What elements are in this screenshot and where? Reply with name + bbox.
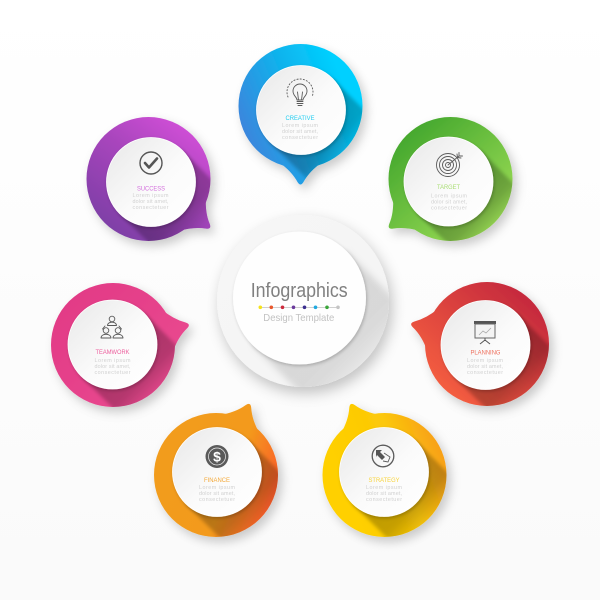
label: STRATEGY: STRATEGY bbox=[368, 477, 400, 484]
colored dots line bbox=[258, 306, 340, 309]
description: target: Lorem ipsum bbox=[431, 194, 468, 200]
description: creative bbox=[282, 123, 318, 141]
disc bbox=[68, 300, 157, 389]
disc bbox=[404, 137, 493, 226]
long shadow bbox=[352, 440, 446, 537]
disc bbox=[340, 428, 428, 516]
description: finance: dolor sit amet, bbox=[199, 491, 236, 497]
description: strategy: dolor sit amet, bbox=[366, 491, 402, 497]
icon: three people bbox=[101, 316, 123, 338]
description: finance: Lorem ipsum bbox=[199, 485, 236, 491]
label: PLANNING: PLANNING bbox=[470, 350, 500, 356]
label: TARGET: TARGET bbox=[437, 184, 460, 191]
subheading: Design Template: Design Template bbox=[263, 312, 334, 324]
description: target bbox=[431, 194, 468, 212]
speech bubble: teamwork bbox=[51, 283, 189, 407]
icon: dollar coin: $ bbox=[213, 448, 221, 464]
disc bbox=[172, 428, 262, 516]
icon: presentation board bbox=[474, 321, 496, 344]
description: planning: Lorem ipsum bbox=[467, 358, 504, 364]
speech bubble: target bbox=[388, 117, 512, 241]
description: target: dolor sit amet, bbox=[431, 200, 468, 206]
description: teamwork bbox=[94, 358, 131, 376]
description: success bbox=[132, 193, 169, 211]
outer disc bbox=[217, 215, 389, 387]
disc bbox=[106, 138, 196, 226]
description: planning: dolor sit amet, bbox=[467, 364, 504, 370]
description: strategy: consectetuer bbox=[366, 497, 402, 503]
description: teamwork: Lorem ipsum bbox=[94, 358, 131, 364]
speech bubble: planning bbox=[411, 282, 549, 406]
description: teamwork: consectetuer bbox=[94, 370, 131, 376]
description: teamwork: dolor sit amet, bbox=[94, 364, 131, 370]
icon: check mark bbox=[140, 152, 162, 174]
description: creative: dolor sit amet, bbox=[282, 129, 318, 135]
panel: planning bbox=[411, 282, 558, 416]
panel: strategy bbox=[322, 404, 455, 546]
disc bbox=[441, 300, 530, 390]
description: target: consectetuer bbox=[431, 206, 467, 212]
description: success: dolor sit amet, bbox=[132, 199, 169, 205]
long shadow bbox=[80, 312, 176, 407]
long shadow bbox=[416, 150, 512, 241]
description: strategy bbox=[366, 485, 402, 503]
description: creative: Lorem ipsum bbox=[282, 123, 318, 129]
heading: Infographics: Infographics bbox=[251, 280, 348, 302]
panel: target bbox=[388, 117, 521, 250]
icon: strategy arrow in ring bbox=[372, 445, 394, 467]
long shadow of inner disc bbox=[253, 252, 389, 387]
icon: dollar coin bbox=[206, 445, 228, 468]
description: success: consectetuer bbox=[132, 205, 169, 211]
description: finance: consectetuer bbox=[199, 497, 235, 503]
icon: target with arrow bbox=[436, 152, 462, 176]
label: TEAMWORK: TEAMWORK bbox=[96, 349, 130, 356]
panel: creative bbox=[238, 44, 382, 191]
speech bubble: strategy bbox=[322, 404, 446, 537]
long shadow bbox=[453, 313, 549, 406]
description: strategy: Lorem ipsum bbox=[366, 485, 402, 491]
speech bubble: success bbox=[86, 117, 210, 241]
long shadow bbox=[184, 440, 278, 537]
label: CREATIVE: CREATIVE bbox=[286, 115, 315, 122]
icon: light bulb bbox=[287, 79, 313, 106]
description: finance bbox=[199, 485, 236, 503]
long shadow bbox=[269, 78, 362, 179]
panel: central title disc bbox=[213, 214, 399, 400]
long shadow bbox=[120, 150, 210, 241]
description: creative: consectetuer bbox=[282, 135, 318, 141]
speech bubble: finance bbox=[154, 404, 278, 537]
label: SUCCESS: SUCCESS bbox=[137, 186, 166, 192]
description: success: Lorem ipsum bbox=[132, 193, 169, 199]
inner disc bbox=[233, 232, 366, 364]
description: planning bbox=[467, 358, 504, 376]
panel: teamwork bbox=[51, 283, 193, 425]
disc bbox=[256, 66, 346, 154]
description: planning: consectetuer bbox=[467, 370, 503, 376]
panel: success bbox=[86, 117, 219, 250]
label: FINANCE: FINANCE bbox=[204, 477, 231, 484]
panel: finance bbox=[154, 404, 286, 546]
speech bubble: creative bbox=[238, 44, 362, 184]
